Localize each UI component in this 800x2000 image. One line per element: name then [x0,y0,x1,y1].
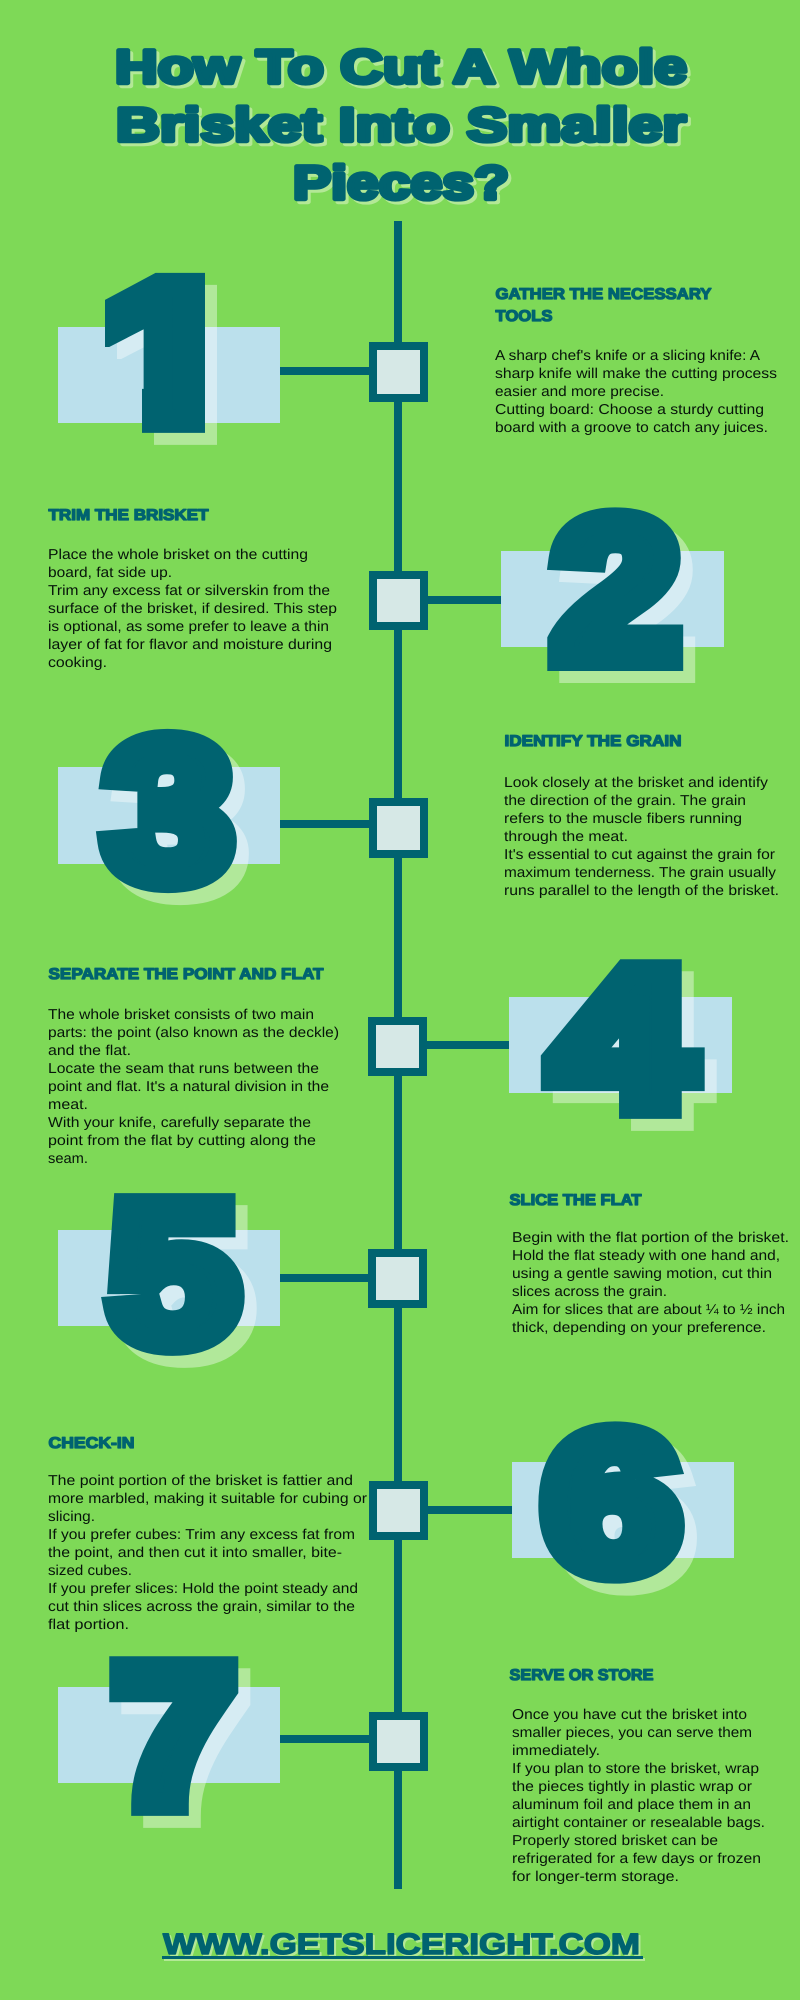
body text step 7: immediately. [512,1743,600,1759]
panel: step 7 [58,1626,765,1885]
title: Brisket Into Smaller [116,99,686,152]
panel: step 5 [58,1163,789,1386]
body text step 6: the point, and then cut it into smaller, bite- [48,1545,342,1561]
number block 5: 5 [110,1163,237,1386]
number block 1: 1 [102,243,236,465]
panel: step 6 [48,1394,734,1633]
body text step 3: through the meat. [504,829,628,845]
body text step 5: slices across the grain. [512,1284,667,1300]
number block 2: 2 [553,479,679,703]
body text step 4: parts: the point (also known as the deckle) [48,1025,339,1041]
connector and node 4 [372,1021,509,1072]
body text step 4: and the flat. [48,1043,131,1059]
body text step 6: cut thin slices across the grain, similar to the [48,1599,355,1615]
body text step 3: Look closely at the brisket and identify [504,775,769,791]
body text step 4: point from the flat by cutting along the [48,1133,316,1149]
number block 6: 6 [544,1394,679,1613]
number block 3 [58,701,280,923]
body text step 7: smaller pieces, you can serve them [512,1725,752,1741]
heading: check-in: CHECK-IN [48,1435,134,1452]
panel: step 4 [48,929,732,1167]
body text step 6: more marbled, making it suitable for cubing or [48,1491,367,1507]
body text step 2: Trim any excess fat or silverskin from the [48,583,330,599]
number block 4: 4 [552,929,692,1150]
body text step 5 [512,1230,789,1336]
body text step 4: meat. [48,1097,88,1113]
number block 5 [58,1163,280,1386]
number block 7 [58,1626,280,1847]
body text step 6 [48,1473,367,1633]
body text step 3: It's essential to cut against the grain for [504,847,775,863]
title [115,41,687,210]
body text step 7: Properly stored brisket can be [512,1833,718,1849]
body text step 2: surface of the brisket, if desired. This step [48,601,337,617]
body text step 2: board, fat side up. [48,565,172,581]
heading: gather the necessary tools [496,286,712,325]
body text step 4: point and flat. It's a natural division in the [48,1079,329,1095]
connector and node 1 [280,346,424,398]
number block 6 [512,1394,734,1613]
footer website link: WWW.GETSLICERIGHT.COM [163,1928,640,1961]
heading: identify the grain: IDENTIFY THE GRAIN [504,733,682,750]
connector and node 2 [373,575,501,626]
body text step 1: A sharp chef's knife or a slicing knife: A [495,348,760,364]
body text step 3: refers to the muscle fibers running [504,811,742,827]
heading: separate the point and flat: SEPARATE THE POINT AND FLAT [48,966,324,983]
body text step 5: Hold the flat steady with one hand and, [512,1248,780,1264]
body text step 4 [48,1007,339,1167]
body text step 1: easier and more precise. [495,384,664,400]
number block 1 [58,272,280,445]
number block 3: 3 [106,701,232,923]
connector and node 5 [280,1253,423,1304]
timeline spine [394,221,402,1889]
title: How To Cut A Whole [115,41,687,94]
body text step 7: refrigerated for a few days or frozen [512,1851,761,1867]
body text step 7: If you plan to store the brisket, wrap [512,1761,759,1777]
number block 2 [501,479,724,703]
body text step 3: the direction of the grain. The grain [504,793,746,809]
number block 4 [509,929,732,1150]
body text step 2: layer of fat for flavor and moisture during [48,637,332,653]
body text step 2: is optional, as some prefer to leave a thin [48,619,329,635]
panel: step 3 [58,701,779,923]
body text step 1: Cutting board: Choose a sturdy cutting [495,402,764,418]
heading: trim the brisket: TRIM THE BRISKET [48,507,209,524]
body text step 5: using a gentle sawing motion, cut thin [512,1266,772,1282]
connector and node 3 [280,802,424,854]
body text step 4: With your knife, carefully separate the [48,1115,311,1131]
heading: gather the necessary tools: GATHER THE NECESSARY [496,286,712,303]
number block 7: 7 [113,1626,235,1847]
body text step 6: slicing. [48,1509,95,1525]
body text step 7: the pieces tightly in plastic wrap or [512,1779,752,1795]
body text step 3: runs parallel to the length of the brisket. [504,883,779,899]
body text step 7: aluminum foil and place them in an [512,1797,751,1813]
body text step 4: The whole brisket consists of two main [48,1007,314,1023]
body text step 7: airtight container or resealable bags. [512,1815,765,1831]
body text step 7: for longer-term storage. [512,1869,679,1885]
body text step 6: If you prefer slices: Hold the point steady and [48,1581,358,1597]
heading: serve or store: SERVE OR STORE [510,1667,654,1684]
body text step 2: cooking. [48,655,107,671]
body text step 5: Begin with the flat portion of the brisket. [512,1230,789,1246]
body text step 1: sharp knife will make the cutting process [495,366,777,382]
title: Pieces? [293,157,509,210]
body text step 4: Locate the seam that runs between the [48,1061,319,1077]
body text step 5: Aim for slices that are about ¼ to ½ inch [512,1302,785,1318]
heading: gather the necessary tools: TOOLS [496,308,552,325]
body text step 6: If you prefer cubes: Trim any excess fat from [48,1527,355,1543]
body text step 1 [495,348,777,436]
body text step 6: flat portion. [48,1617,129,1633]
body text step 3 [504,775,779,899]
body text step 4: seam. [48,1151,88,1167]
body text step 7 [512,1707,765,1885]
panel: step 1 [58,272,776,445]
body text step 3: maximum tenderness. The grain usually [504,865,777,881]
body text step 2: Place the whole brisket on the cutting [48,547,308,563]
body text step 2 [48,547,337,671]
body text step 6: The point portion of the brisket is fattier and [48,1473,353,1489]
body text step 5: thick, depending on your preference. [512,1320,766,1336]
body text step 6: sized cubes. [48,1563,132,1579]
connector and node 6 [373,1485,512,1536]
heading: slice the flat: SLICE THE FLAT [510,1192,642,1209]
connector and node 7 [280,1716,424,1767]
body text step 7: Once you have cut the brisket into [512,1707,747,1723]
body text step 1: board with a groove to catch any juices. [495,420,768,436]
panel: step 2 [48,479,724,703]
